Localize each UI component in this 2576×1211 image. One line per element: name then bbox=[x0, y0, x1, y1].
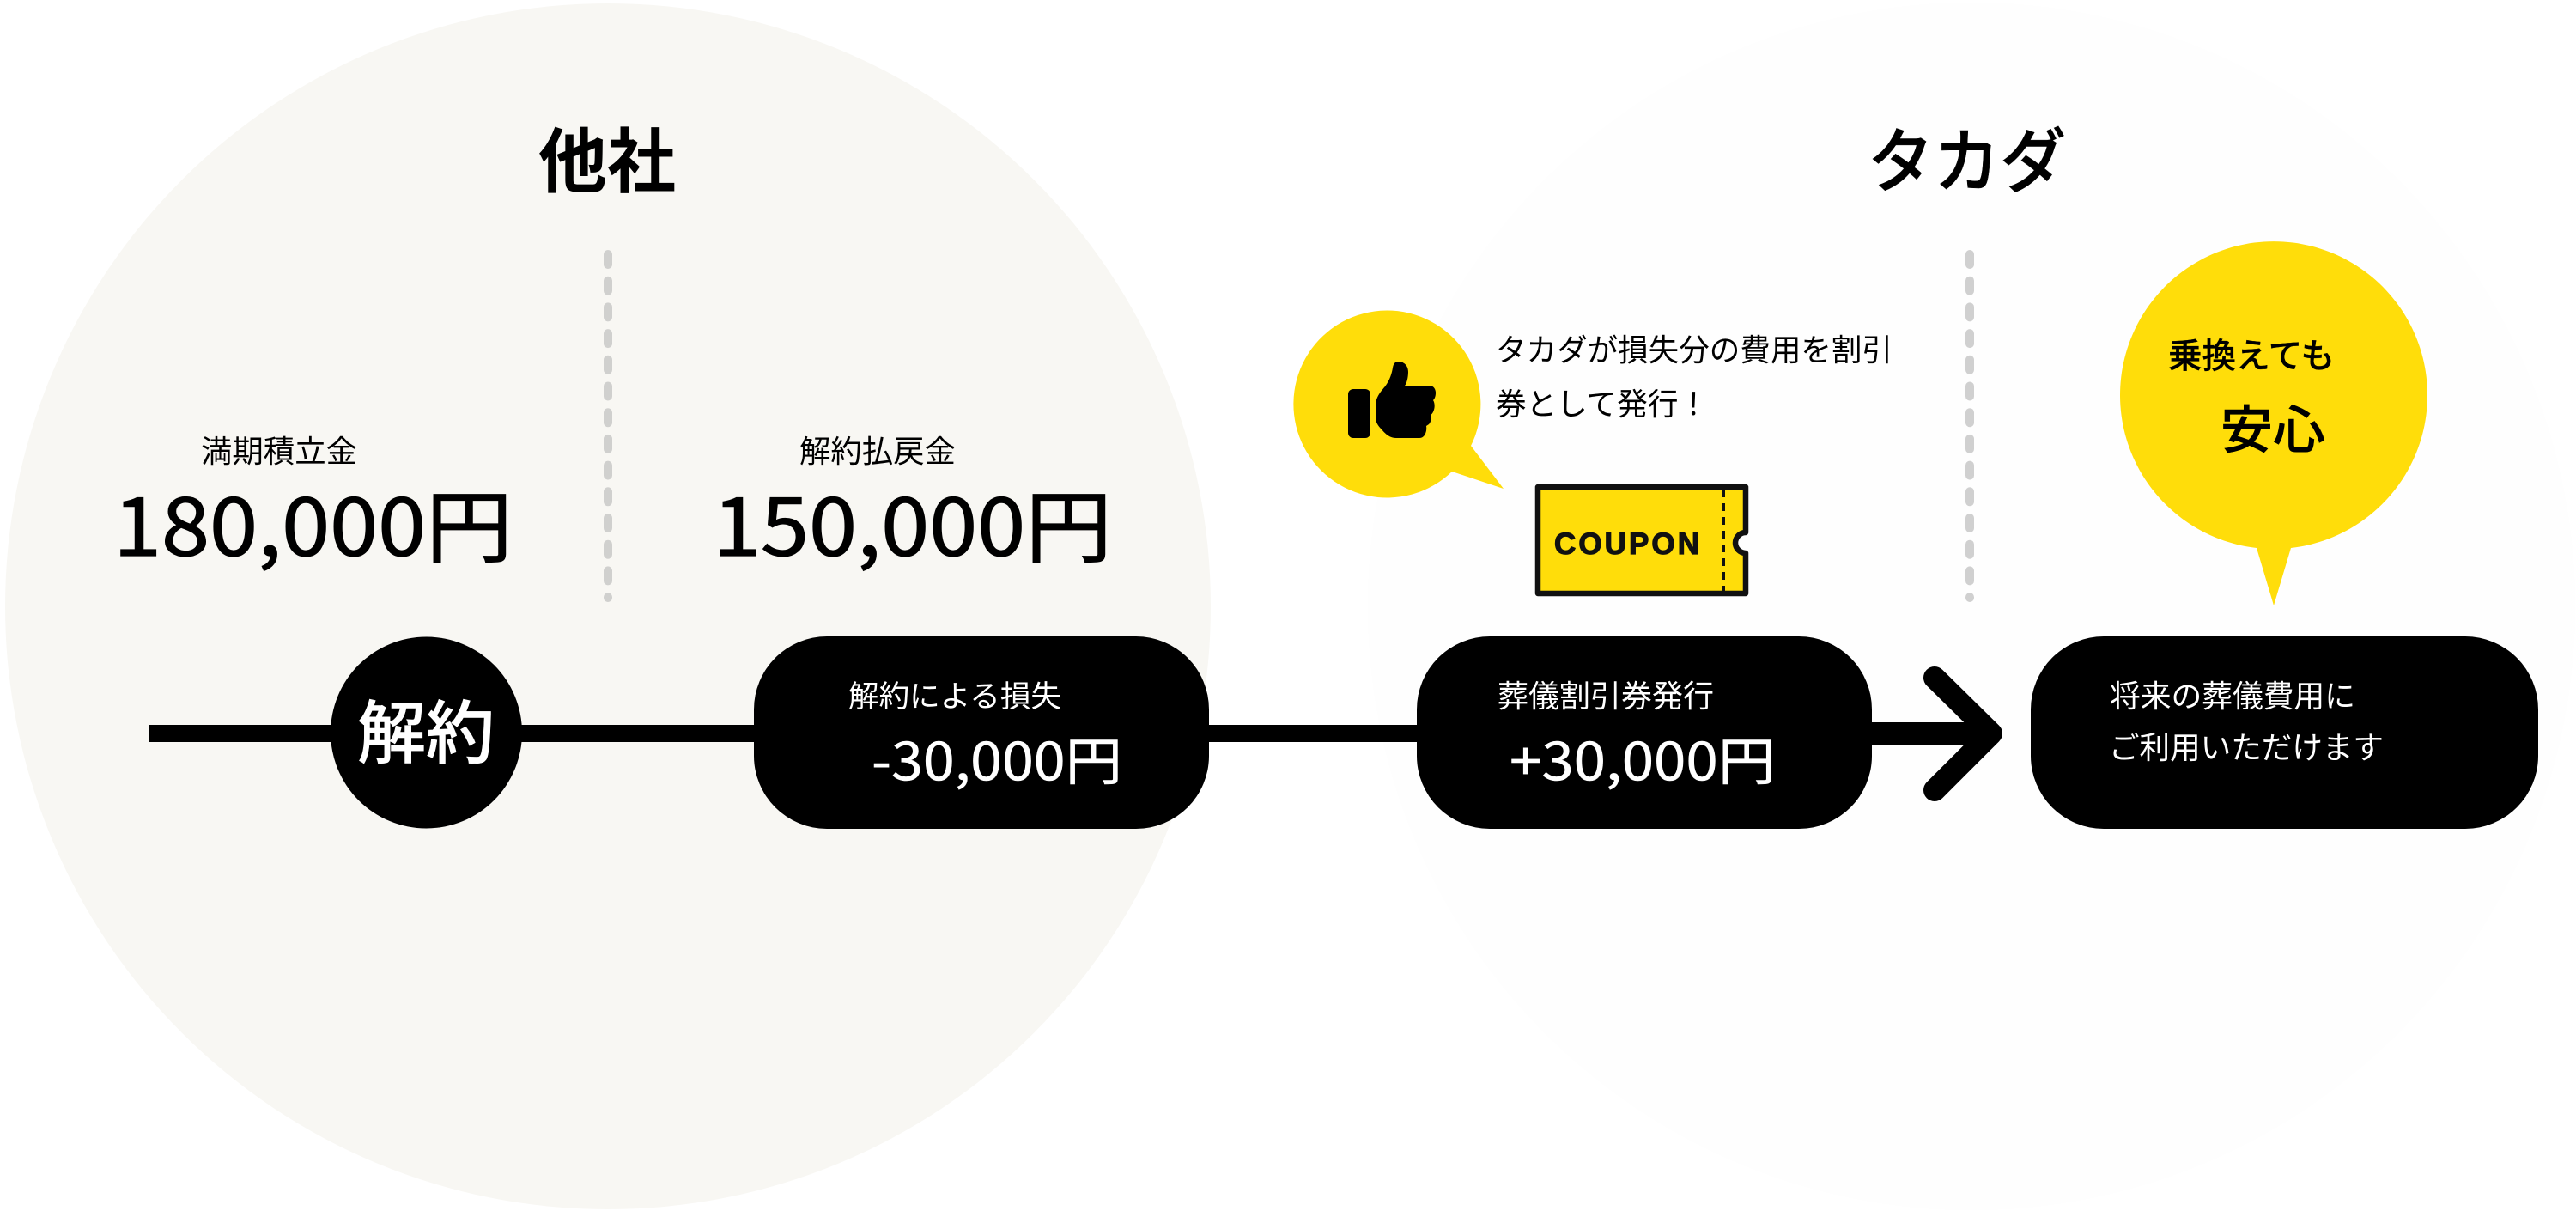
text: even when switching: 乗換えても bbox=[2168, 328, 2335, 378]
text block: maturity savings bbox=[113, 427, 513, 579]
callout: peace of mind speech bubble bbox=[2120, 241, 2427, 606]
timeline line: left segment bbox=[149, 725, 1420, 742]
text: callout line two: 券として発行！ bbox=[1496, 380, 1709, 424]
divider: Takada dotted line bbox=[1965, 254, 1974, 598]
text: future funeral costs line one: 将来の葬儀費用に bbox=[2110, 672, 2355, 716]
panel: competitor background circle bbox=[5, 3, 1211, 1209]
icon: coupon ticket: COUPON bbox=[1554, 527, 1699, 561]
panel: Takada background circle bbox=[1368, 3, 2575, 1210]
pill: funeral discount coupon issue bbox=[1417, 636, 1872, 829]
amount: 150,000 yen: 150,000円 bbox=[713, 465, 1112, 579]
heading: Takada: タカダ bbox=[1868, 105, 2066, 207]
text: peace of mind: 安心 bbox=[2221, 389, 2325, 464]
text: future funeral costs line two: ご利用いただけます bbox=[2109, 723, 2384, 768]
text block: cancellation refund bbox=[713, 427, 1112, 579]
arrow: timeline arrow to final box bbox=[1863, 678, 1992, 790]
amount: 180,000 yen: 180,000円 bbox=[113, 465, 513, 579]
pill: usable for future funeral costs bbox=[2031, 636, 2538, 829]
amount: minus 30,000 yen: -30,000円 bbox=[872, 721, 1122, 795]
divider: competitor dotted line bbox=[604, 254, 612, 598]
label: maturity savings: 満期積立金 bbox=[201, 427, 357, 472]
amount: plus 30,000 yen: +30,000円 bbox=[1510, 721, 1776, 795]
text block: Takada covers loss with a coupon bbox=[1496, 326, 1893, 424]
icon: coupon ticket bbox=[1538, 487, 1746, 593]
text: callout line one: タカダが損失分の費用を割引 bbox=[1496, 326, 1893, 370]
heading: competitor: 他社 bbox=[538, 105, 676, 207]
label: funeral discount coupon issue: 葬儀割引券発行 bbox=[1498, 672, 1714, 716]
pill: loss from cancellation bbox=[754, 636, 1209, 829]
node: cancellation circle bbox=[331, 637, 522, 828]
label: cancellation refund: 解約払戻金 bbox=[799, 427, 956, 472]
label: loss from cancellation: 解約による損失 bbox=[848, 672, 1061, 716]
node: cancellation circle: 解約 bbox=[357, 679, 495, 778]
icon: thumbs up speech bubble bbox=[1293, 310, 1504, 497]
